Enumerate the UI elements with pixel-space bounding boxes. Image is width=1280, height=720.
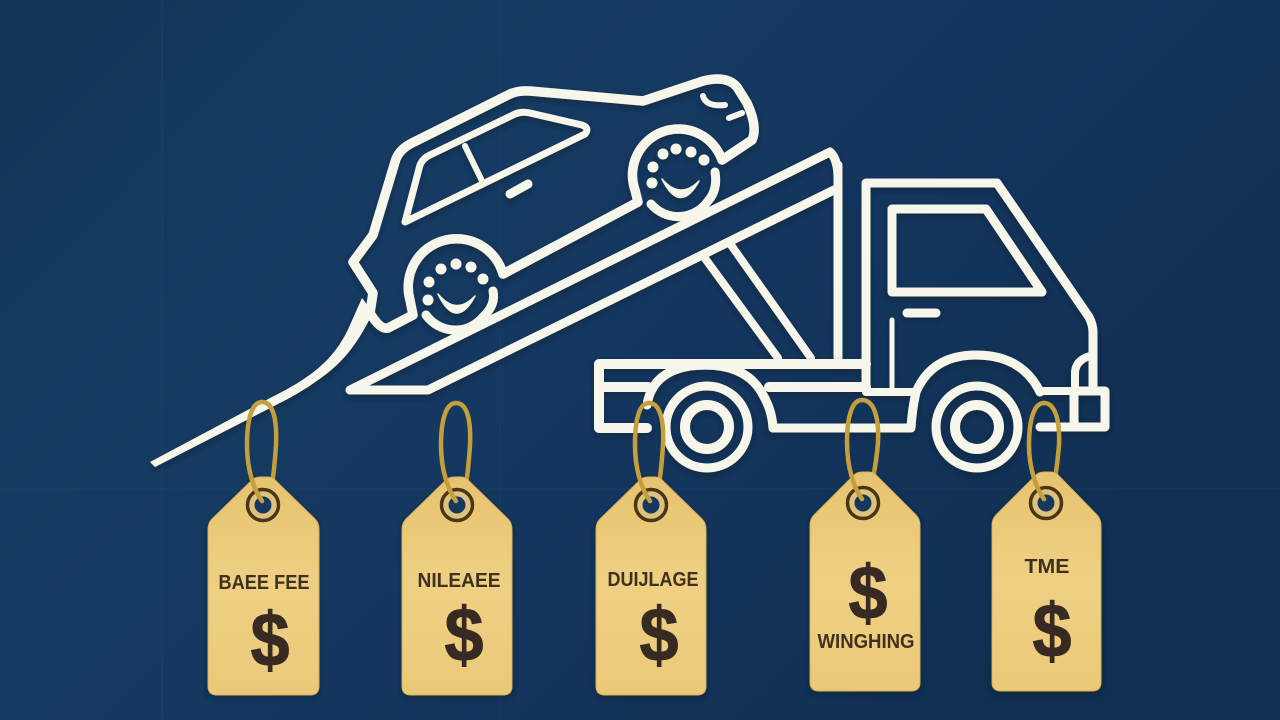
window pillar xyxy=(465,146,483,183)
eyelet xyxy=(636,490,666,520)
label: NILEAEE xyxy=(418,570,500,592)
rear car wheel xyxy=(422,258,494,330)
tow mast xyxy=(834,165,842,362)
rear truck wheel xyxy=(666,386,748,468)
loop back xyxy=(649,403,663,484)
dollar sign: $ xyxy=(250,598,290,683)
eyelet xyxy=(848,488,878,518)
eyelet xyxy=(248,490,278,520)
eyelet xyxy=(442,490,472,520)
price tag: mileage xyxy=(402,403,512,695)
cab window xyxy=(892,209,1042,292)
tag body xyxy=(992,472,1101,691)
loop back xyxy=(1044,403,1059,478)
door handle xyxy=(510,184,528,194)
tag body xyxy=(810,472,920,691)
door handle xyxy=(907,308,936,318)
label: WINGHING xyxy=(818,631,914,653)
tow truck xyxy=(599,183,1105,468)
tail line running to the road xyxy=(150,298,373,467)
tag body xyxy=(208,477,319,695)
loop back xyxy=(862,400,878,478)
tag body xyxy=(596,477,706,695)
dollar sign: $ xyxy=(848,551,888,636)
truck bed xyxy=(599,364,866,428)
loop back xyxy=(456,403,470,484)
price tag: base fee xyxy=(208,402,319,695)
truck sill xyxy=(773,355,1040,428)
front truck wheel xyxy=(936,386,1018,468)
price tag: time xyxy=(992,403,1101,691)
car on ramp xyxy=(150,79,838,467)
headlight xyxy=(1075,356,1090,390)
label: DUIJLAGE xyxy=(608,569,698,591)
rear wheel arch xyxy=(647,365,773,428)
bumper xyxy=(1040,391,1105,427)
label: TME xyxy=(1024,556,1070,578)
front car wheel xyxy=(646,144,716,217)
loop front xyxy=(247,402,262,501)
loop back xyxy=(262,402,276,484)
label: BAEE FEE xyxy=(218,572,310,594)
loop front xyxy=(1029,403,1044,499)
car body outline xyxy=(353,79,754,328)
car headlight xyxy=(703,96,742,118)
dollar sign: $ xyxy=(444,593,484,678)
dollar sign: $ xyxy=(640,593,678,678)
price tag: duration xyxy=(596,403,706,695)
door line xyxy=(890,320,894,392)
dollar sign: $ xyxy=(1032,589,1072,674)
loop front xyxy=(441,403,456,501)
ramp struts xyxy=(704,245,811,358)
ramp xyxy=(350,152,838,390)
eyelet xyxy=(1030,488,1062,518)
cab floor xyxy=(866,391,1074,392)
truck cab xyxy=(866,183,1093,387)
loop front xyxy=(847,400,862,499)
tag body xyxy=(402,477,512,695)
price tag: winching xyxy=(810,400,920,691)
loop front xyxy=(635,403,650,501)
car window xyxy=(405,112,587,222)
